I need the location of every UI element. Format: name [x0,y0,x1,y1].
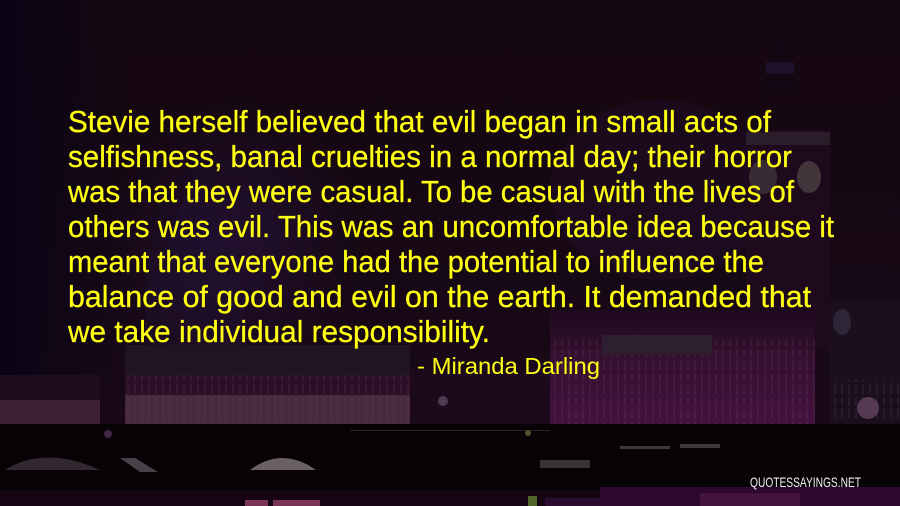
background: Big Ben clock tower [746,20,830,350]
quote text: was that they were casual. To be casual with the lives of [67,174,794,209]
quote text [67,104,834,349]
clock faces [749,160,821,194]
quote text: selfishness, banal cruelties in a normal day; their horror [68,139,792,174]
background: bridge and arches [0,396,900,506]
watermark: QUOTESSAYINGS.NET [750,474,861,490]
quote text: we take individual responsibility. [67,314,490,349]
background: water reflections [0,487,900,506]
background: central gothic tower [145,170,245,350]
attribution: - Miranda Darling [417,353,600,379]
quote text: Stevie herself believed that evil began in small acts of [68,104,771,139]
quote text: meant that everyone had the potential to influence the [68,244,764,279]
quote text: balance of good and evil on the earth. It demanded that [68,279,811,314]
quote text: others was evil. This was an uncomfortable idea because it [68,209,834,244]
background: Parliament building [0,300,900,425]
